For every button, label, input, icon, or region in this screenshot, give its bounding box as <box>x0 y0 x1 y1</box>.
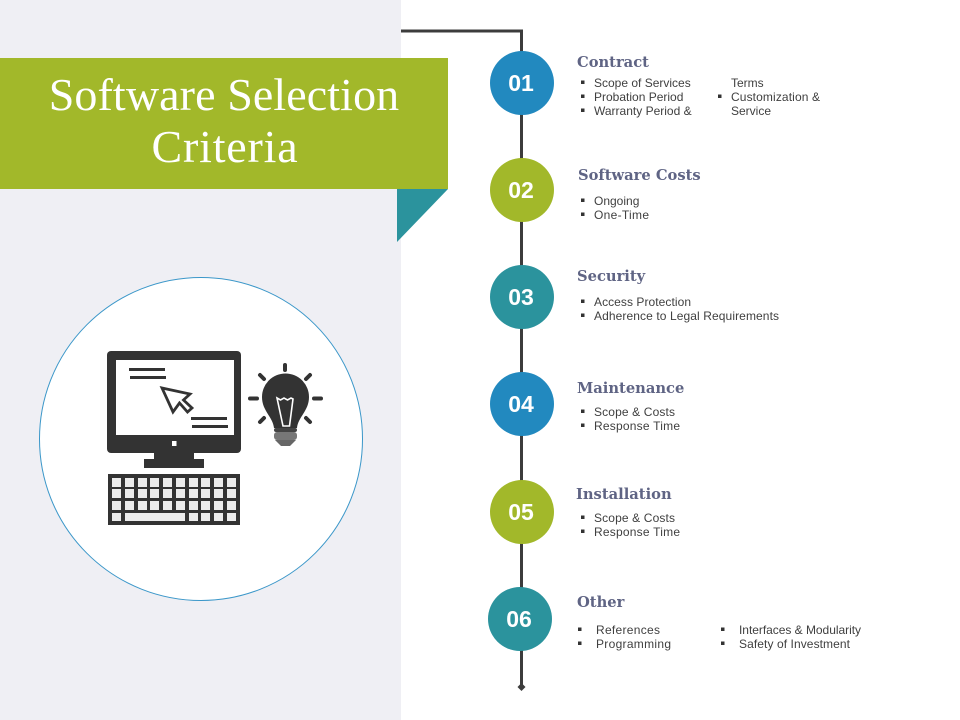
bullets: Software Costs <box>581 194 649 222</box>
badge 04 <box>490 372 554 436</box>
bullets: Other <box>578 623 861 651</box>
badge 05: 05 <box>508 499 534 525</box>
bullets: Contract: Probation Period <box>594 90 683 104</box>
step 03 <box>490 265 779 329</box>
bullets: Other: Safety of Investment <box>739 637 851 651</box>
bullets: Installation: Response Time <box>594 525 680 539</box>
step 05 <box>490 480 680 544</box>
icon: keyboard <box>108 474 240 525</box>
icon: computer monitor <box>107 351 241 468</box>
timeline line <box>401 31 526 691</box>
bullets: Contract <box>581 76 820 118</box>
bullets: Maintenance: Scope & Costs <box>594 405 675 419</box>
title: Software Selection <box>49 69 399 120</box>
title: Criteria <box>152 121 298 172</box>
step 01 <box>490 51 820 118</box>
bullets: Software Costs: Ongoing <box>594 194 639 208</box>
badge 06 <box>488 587 552 651</box>
step 06 <box>488 587 861 651</box>
badge 01: 01 <box>508 70 534 96</box>
bullets: Other: Programming <box>596 637 671 651</box>
left background panel <box>0 0 401 720</box>
bullets: Security: Access Protection <box>594 295 691 309</box>
title banner fold <box>397 189 448 242</box>
badge 01 <box>490 51 554 115</box>
bullets: Contract: Terms <box>731 76 764 90</box>
badge 03 <box>490 265 554 329</box>
heading: Maintenance: Maintenance <box>577 380 684 397</box>
bullets: Installation: Scope & Costs <box>594 511 675 525</box>
bullets: Security <box>581 295 779 323</box>
bullets: Other: References <box>596 623 660 637</box>
heading: Security: Security <box>577 268 646 285</box>
heading: Installation: Installation <box>576 486 672 503</box>
badge 05 <box>490 480 554 544</box>
bullets: Software Costs: One-Time <box>594 208 649 222</box>
bullets: Contract: Scope of Services <box>594 76 691 90</box>
icon: light bulb <box>250 365 321 446</box>
heading: Software Costs: Software Costs <box>578 167 701 184</box>
bullets: Contract: Warranty Period & <box>594 104 692 118</box>
badge 03: 03 <box>508 284 534 310</box>
bullets: Maintenance: Response Time <box>594 419 680 433</box>
bullets: Installation <box>581 511 680 539</box>
badge 02 <box>490 158 554 222</box>
bullets: Contract: Customization & <box>731 90 820 104</box>
heading: Other: Other <box>577 594 625 611</box>
badge 04: 04 <box>508 391 534 417</box>
bullets: Security: Adherence to Legal Requirements <box>594 309 779 323</box>
step 04 <box>490 372 684 436</box>
step 02 <box>490 158 701 222</box>
badge 06: 06 <box>506 606 532 632</box>
badge 02: 02 <box>508 177 534 203</box>
bullets: Other: Interfaces & Modularity <box>739 623 861 637</box>
title banner <box>0 58 448 189</box>
bullets: Contract: Service <box>731 104 771 118</box>
bullets: Maintenance <box>581 405 680 433</box>
illustration circle <box>40 278 362 600</box>
heading: Contract: Contract <box>577 54 649 71</box>
